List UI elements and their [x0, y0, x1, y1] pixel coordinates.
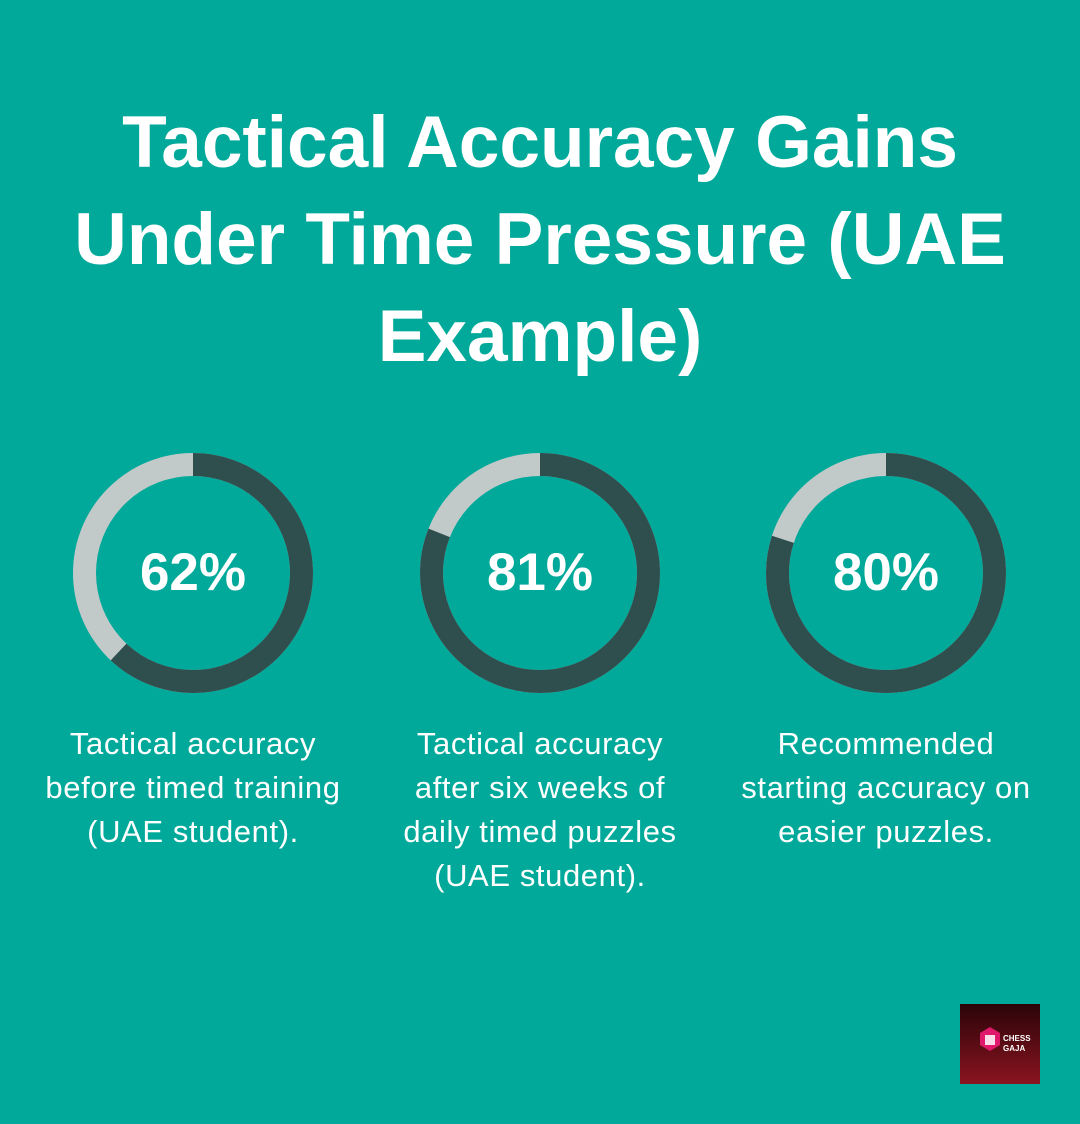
title — [74, 102, 1006, 377]
title: Under Time Pressure (UAE — [74, 199, 1006, 280]
logo — [960, 1004, 1040, 1084]
ring: 62% — [73, 453, 313, 693]
label 2: Tactical accuracy — [417, 726, 663, 761]
ring: 62%: 62% — [140, 543, 246, 602]
label 3: starting accuracy on — [741, 770, 1031, 805]
ring: 80% — [766, 453, 1006, 693]
label 1: (UAE student). — [87, 814, 299, 849]
label 1: before timed training — [45, 770, 341, 805]
label 2: after six weeks of — [415, 770, 665, 805]
ring: 80%: 80% — [833, 543, 939, 602]
label 2: daily timed puzzles — [403, 814, 677, 849]
label 1 — [45, 726, 341, 849]
label 2 — [403, 726, 677, 893]
logo: CHESS — [1003, 1034, 1031, 1043]
logo: GAJA — [1003, 1044, 1025, 1053]
title: Example) — [378, 296, 702, 377]
label 1: Tactical accuracy — [70, 726, 316, 761]
label 3: Recommended — [778, 726, 994, 761]
title: Tactical Accuracy Gains — [122, 102, 958, 183]
label 2: (UAE student). — [434, 858, 646, 893]
ring: 81%: 81% — [487, 543, 593, 602]
label 3: easier puzzles. — [778, 814, 994, 849]
label 3 — [741, 726, 1031, 849]
ring: 81% — [420, 453, 660, 693]
